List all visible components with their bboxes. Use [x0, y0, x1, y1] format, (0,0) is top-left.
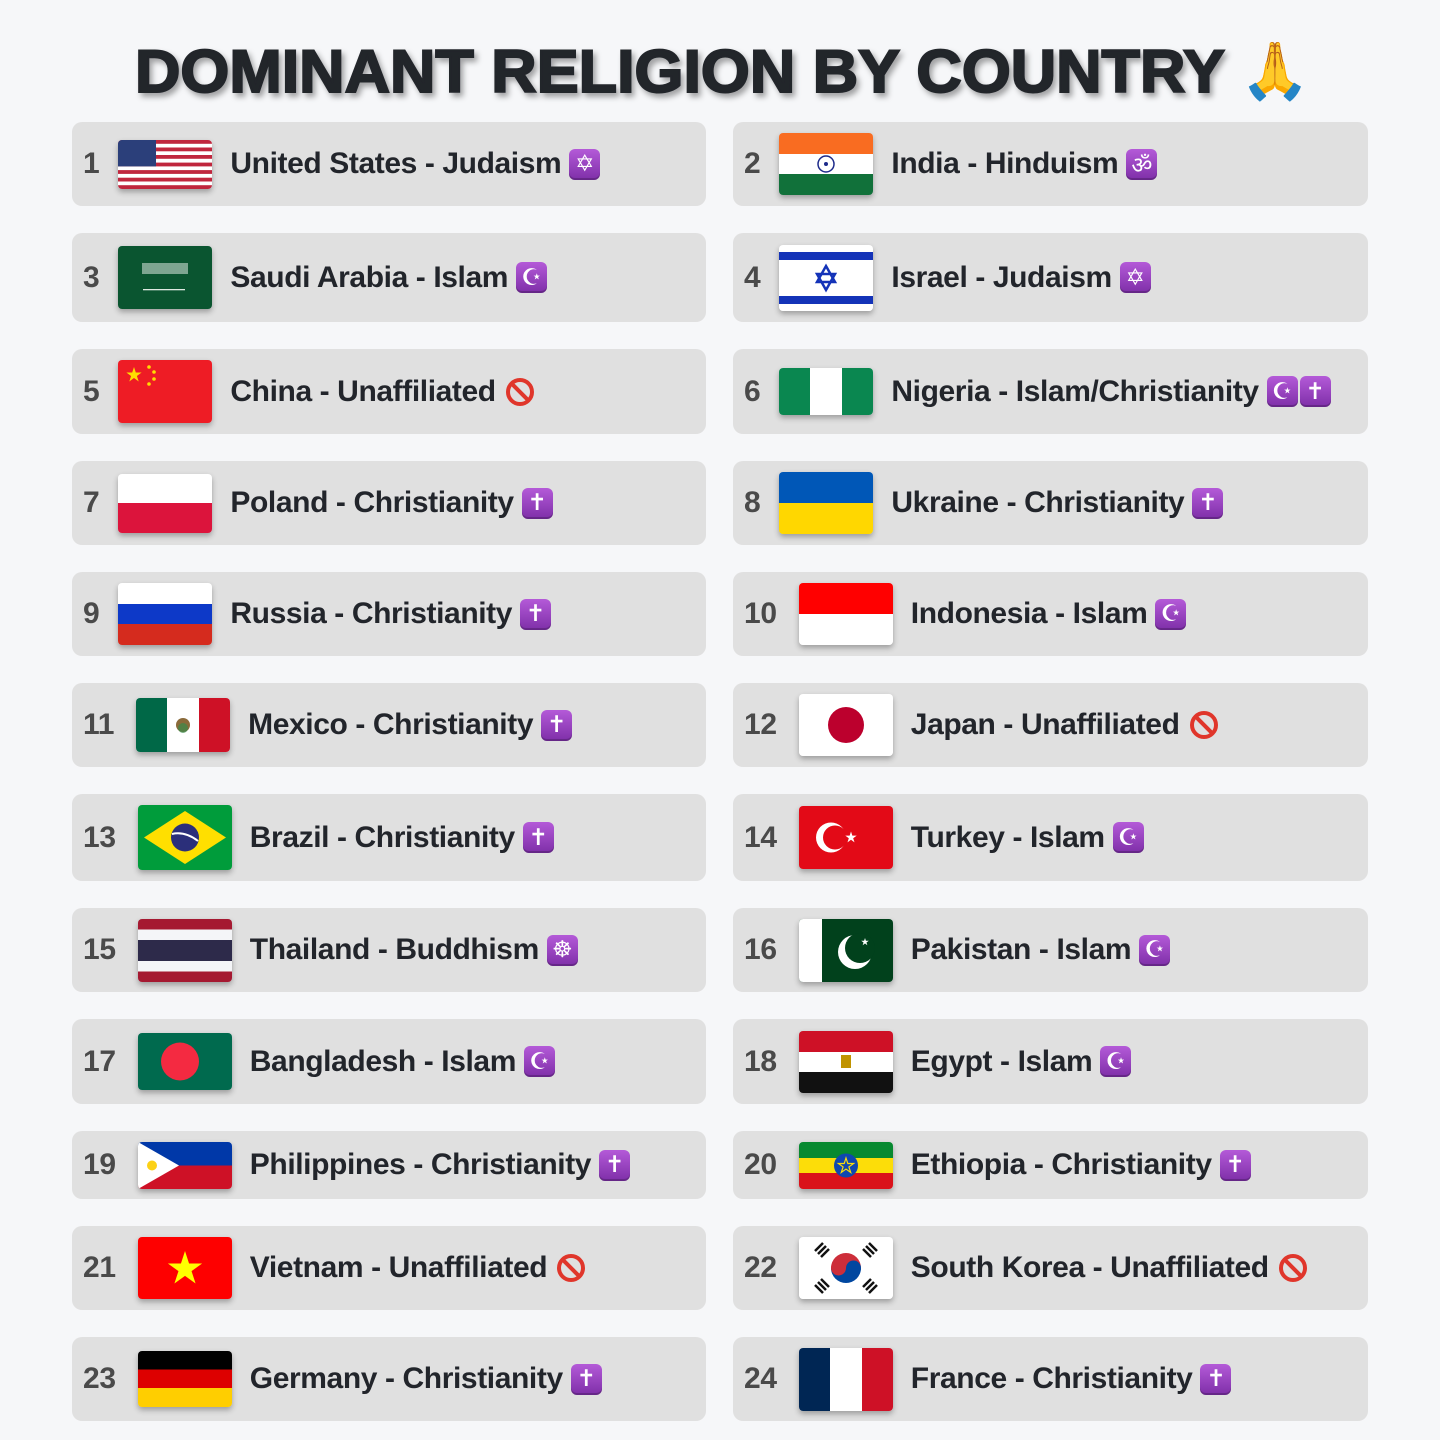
row 12: Japan: Japan - Unaffiliated	[911, 708, 1180, 741]
row 22: South Korea	[733, 1226, 1368, 1310]
row 2: India: ॐ	[1131, 153, 1152, 179]
row 15: Thailand: Thailand - Buddhism	[250, 933, 539, 966]
row 24: France: 24	[744, 1362, 777, 1395]
row 8: Ukraine: 8	[744, 486, 760, 519]
row 21: Vietnam: Vietnam - Unaffiliated	[250, 1251, 547, 1284]
row 10: Indonesia: 10	[744, 597, 777, 630]
row 17: Bangladesh: 17	[83, 1044, 116, 1078]
row 19: Philippines	[72, 1131, 706, 1199]
row 22: South Korea: South Korea - Unaffiliated	[911, 1251, 1269, 1284]
row 13: Brazil: 13	[83, 820, 116, 854]
row 16: Pakistan: ☪	[1144, 937, 1165, 963]
row 24: France: France - Christianity	[911, 1362, 1192, 1395]
row 16: Pakistan: Pakistan - Islam	[911, 933, 1131, 966]
row 13: Brazil	[72, 794, 706, 881]
row 10: Indonesia	[733, 572, 1368, 656]
row 19: Philippines: 19	[83, 1148, 116, 1181]
row 10: Indonesia: Indonesia - Islam	[911, 597, 1147, 630]
row 16: Pakistan: 16	[744, 933, 777, 966]
row 13: Brazil: Brazil - Christianity	[250, 820, 515, 854]
row 24: France	[733, 1337, 1368, 1421]
row 1: United States: United States - Judaism	[230, 147, 561, 180]
row 3: Saudi Arabia: Saudi Arabia - Islam	[230, 260, 508, 294]
row 6: Nigeria: ✝	[1306, 378, 1325, 404]
row 6: Nigeria: ☪	[1272, 378, 1292, 404]
row 5: China: China - Unaffiliated	[230, 374, 496, 408]
row 20: Ethiopia: Ethiopia - Christianity	[911, 1148, 1212, 1181]
row 4: Israel: ✡	[1126, 264, 1145, 290]
row 4: Israel: 4	[744, 260, 760, 294]
row 9: Russia: Russia - Christianity	[230, 597, 512, 630]
row 6: Nigeria: 6	[744, 374, 760, 408]
row 14: Turkey: ☪	[1118, 824, 1139, 850]
row 19: Philippines: Philippines - Christianity	[250, 1148, 591, 1181]
row 14: Turkey: Turkey - Islam	[911, 820, 1105, 854]
row 11: Mexico: ✝	[547, 712, 566, 738]
row 10: Indonesia: ☪	[1161, 601, 1181, 627]
row 18: Egypt: ☪	[1105, 1048, 1126, 1074]
row 1: United States: ✡	[575, 151, 594, 177]
row 18: Egypt	[733, 1019, 1368, 1104]
row 7: Poland	[72, 461, 706, 545]
row 23: Germany: ✝	[577, 1366, 596, 1392]
row 16: Pakistan	[733, 908, 1368, 992]
row 15: Thailand: ☸	[552, 937, 573, 963]
row 3: Saudi Arabia: 3	[83, 260, 99, 294]
row 9: Russia	[72, 572, 706, 656]
row 17: Bangladesh: Bangladesh - Islam	[250, 1044, 516, 1078]
row 20: Ethiopia: ✝	[1225, 1152, 1245, 1178]
row 7: Poland: ✝	[528, 490, 547, 516]
row 2: India: 2	[744, 147, 760, 180]
row 5: China	[72, 349, 706, 434]
row 9: Russia: 9	[83, 597, 99, 630]
row 24: France: ✝	[1206, 1366, 1226, 1392]
row 8: Ukraine: ✝	[1198, 490, 1217, 516]
row 11: Mexico: Mexico - Christianity	[248, 708, 533, 741]
row 23: Germany	[72, 1337, 706, 1421]
row 9: Russia: ✝	[526, 601, 545, 627]
row 4: Israel	[733, 233, 1368, 322]
row 1: United States: 1	[83, 147, 99, 180]
row 6: Nigeria	[733, 349, 1368, 434]
row 23: Germany: 23	[83, 1362, 116, 1395]
row 18: Egypt: Egypt - Islam	[911, 1044, 1092, 1078]
row 14: Turkey	[733, 794, 1368, 881]
row 6: Nigeria: Nigeria - Islam/Christianity	[891, 374, 1259, 408]
row 8: Ukraine	[733, 461, 1368, 545]
row 8: Ukraine: Ukraine - Christianity	[891, 486, 1184, 519]
row 23: Germany: Germany - Christianity	[250, 1362, 563, 1395]
row 1: United States	[72, 122, 706, 206]
row 7: Poland: 7	[83, 486, 99, 519]
row 17: Bangladesh	[72, 1019, 706, 1104]
row 21: Vietnam: 21	[83, 1251, 116, 1284]
row 15: Thailand: 15	[83, 933, 116, 966]
row 15: Thailand	[72, 908, 706, 992]
row 2: India: India - Hinduism	[891, 147, 1118, 180]
row 22: South Korea: 22	[744, 1251, 777, 1284]
row 12: Japan: 12	[744, 708, 777, 741]
row 14: Turkey: 14	[744, 820, 777, 854]
title: DOMINANT RELIGION BY COUNTRY	[135, 38, 1225, 105]
row 20: Ethiopia: 20	[744, 1148, 777, 1181]
row 12: Japan	[733, 683, 1368, 767]
row 17: Bangladesh: ☪	[529, 1048, 550, 1074]
row 2: India	[733, 122, 1368, 206]
row 7: Poland: Poland - Christianity	[230, 486, 514, 519]
row 3: Saudi Arabia	[72, 233, 706, 322]
row 20: Ethiopia	[733, 1131, 1368, 1199]
row 3: Saudi Arabia: ☪	[521, 264, 542, 290]
title: 🙏	[1240, 39, 1310, 103]
row 11: Mexico	[72, 683, 706, 767]
row 19: Philippines: ✝	[605, 1152, 624, 1178]
row 4: Israel: Israel - Judaism	[891, 260, 1112, 294]
row 13: Brazil: ✝	[529, 824, 548, 850]
row 21: Vietnam	[72, 1226, 706, 1310]
row 11: Mexico: 11	[83, 708, 114, 741]
row 5: China: 5	[83, 374, 99, 408]
row 18: Egypt: 18	[744, 1044, 777, 1078]
